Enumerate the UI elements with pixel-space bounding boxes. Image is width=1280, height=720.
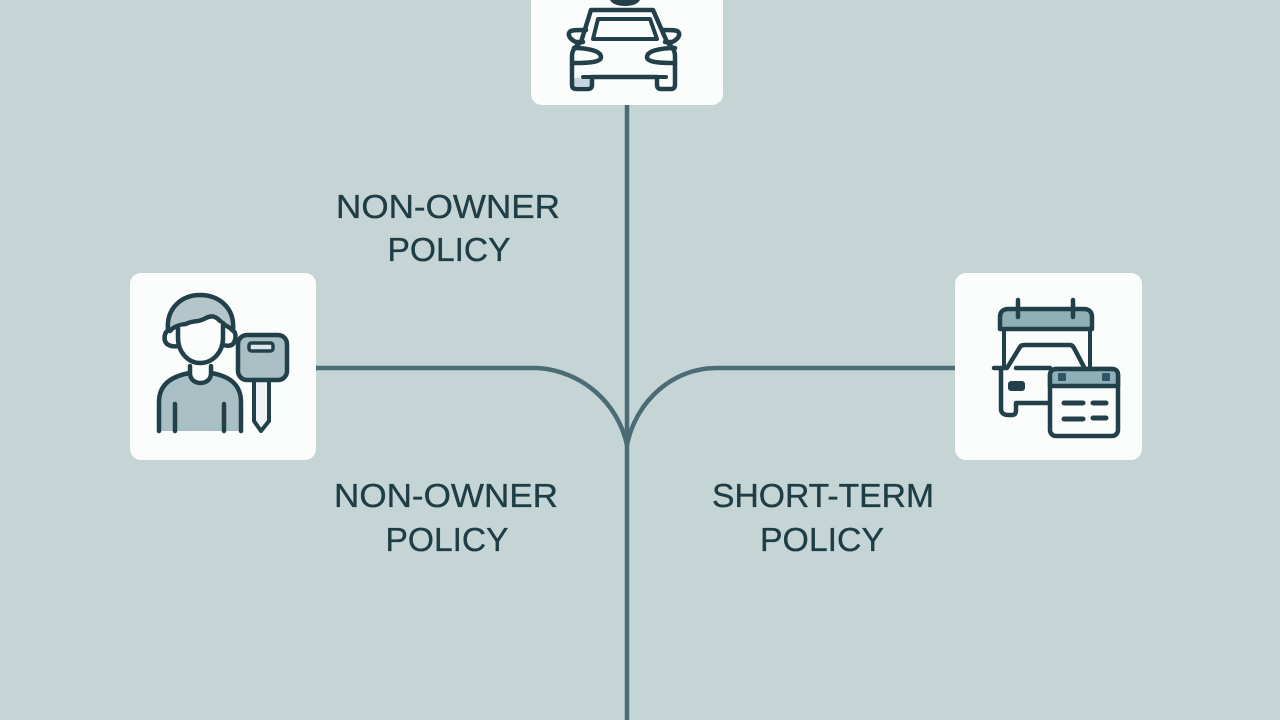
heading: short-term policy [712,477,934,558]
icon: large calendar [1000,300,1092,368]
heading: non-owner policy upper: POLICY [388,231,510,268]
icon: car side [994,345,1084,415]
heading: non-owner policy upper [336,188,560,268]
icon: key [238,335,287,431]
panel: car icon card [531,0,723,105]
heading: short-term policy: POLICY [760,521,884,558]
connector lines [316,104,955,720]
icon: small calendar [1050,369,1118,436]
icon: person [159,295,241,431]
heading: non-owner policy lower: POLICY [386,521,508,558]
panel: person and key card [130,273,316,460]
heading: non-owner policy upper: NON-OWNER [336,188,560,225]
heading: non-owner policy lower [334,477,558,558]
panel: car and calendar card [955,273,1142,460]
heading: non-owner policy lower: NON-OWNER [334,477,558,514]
heading: short-term policy: SHORT-TERM [712,477,934,514]
icon: car [569,0,679,89]
